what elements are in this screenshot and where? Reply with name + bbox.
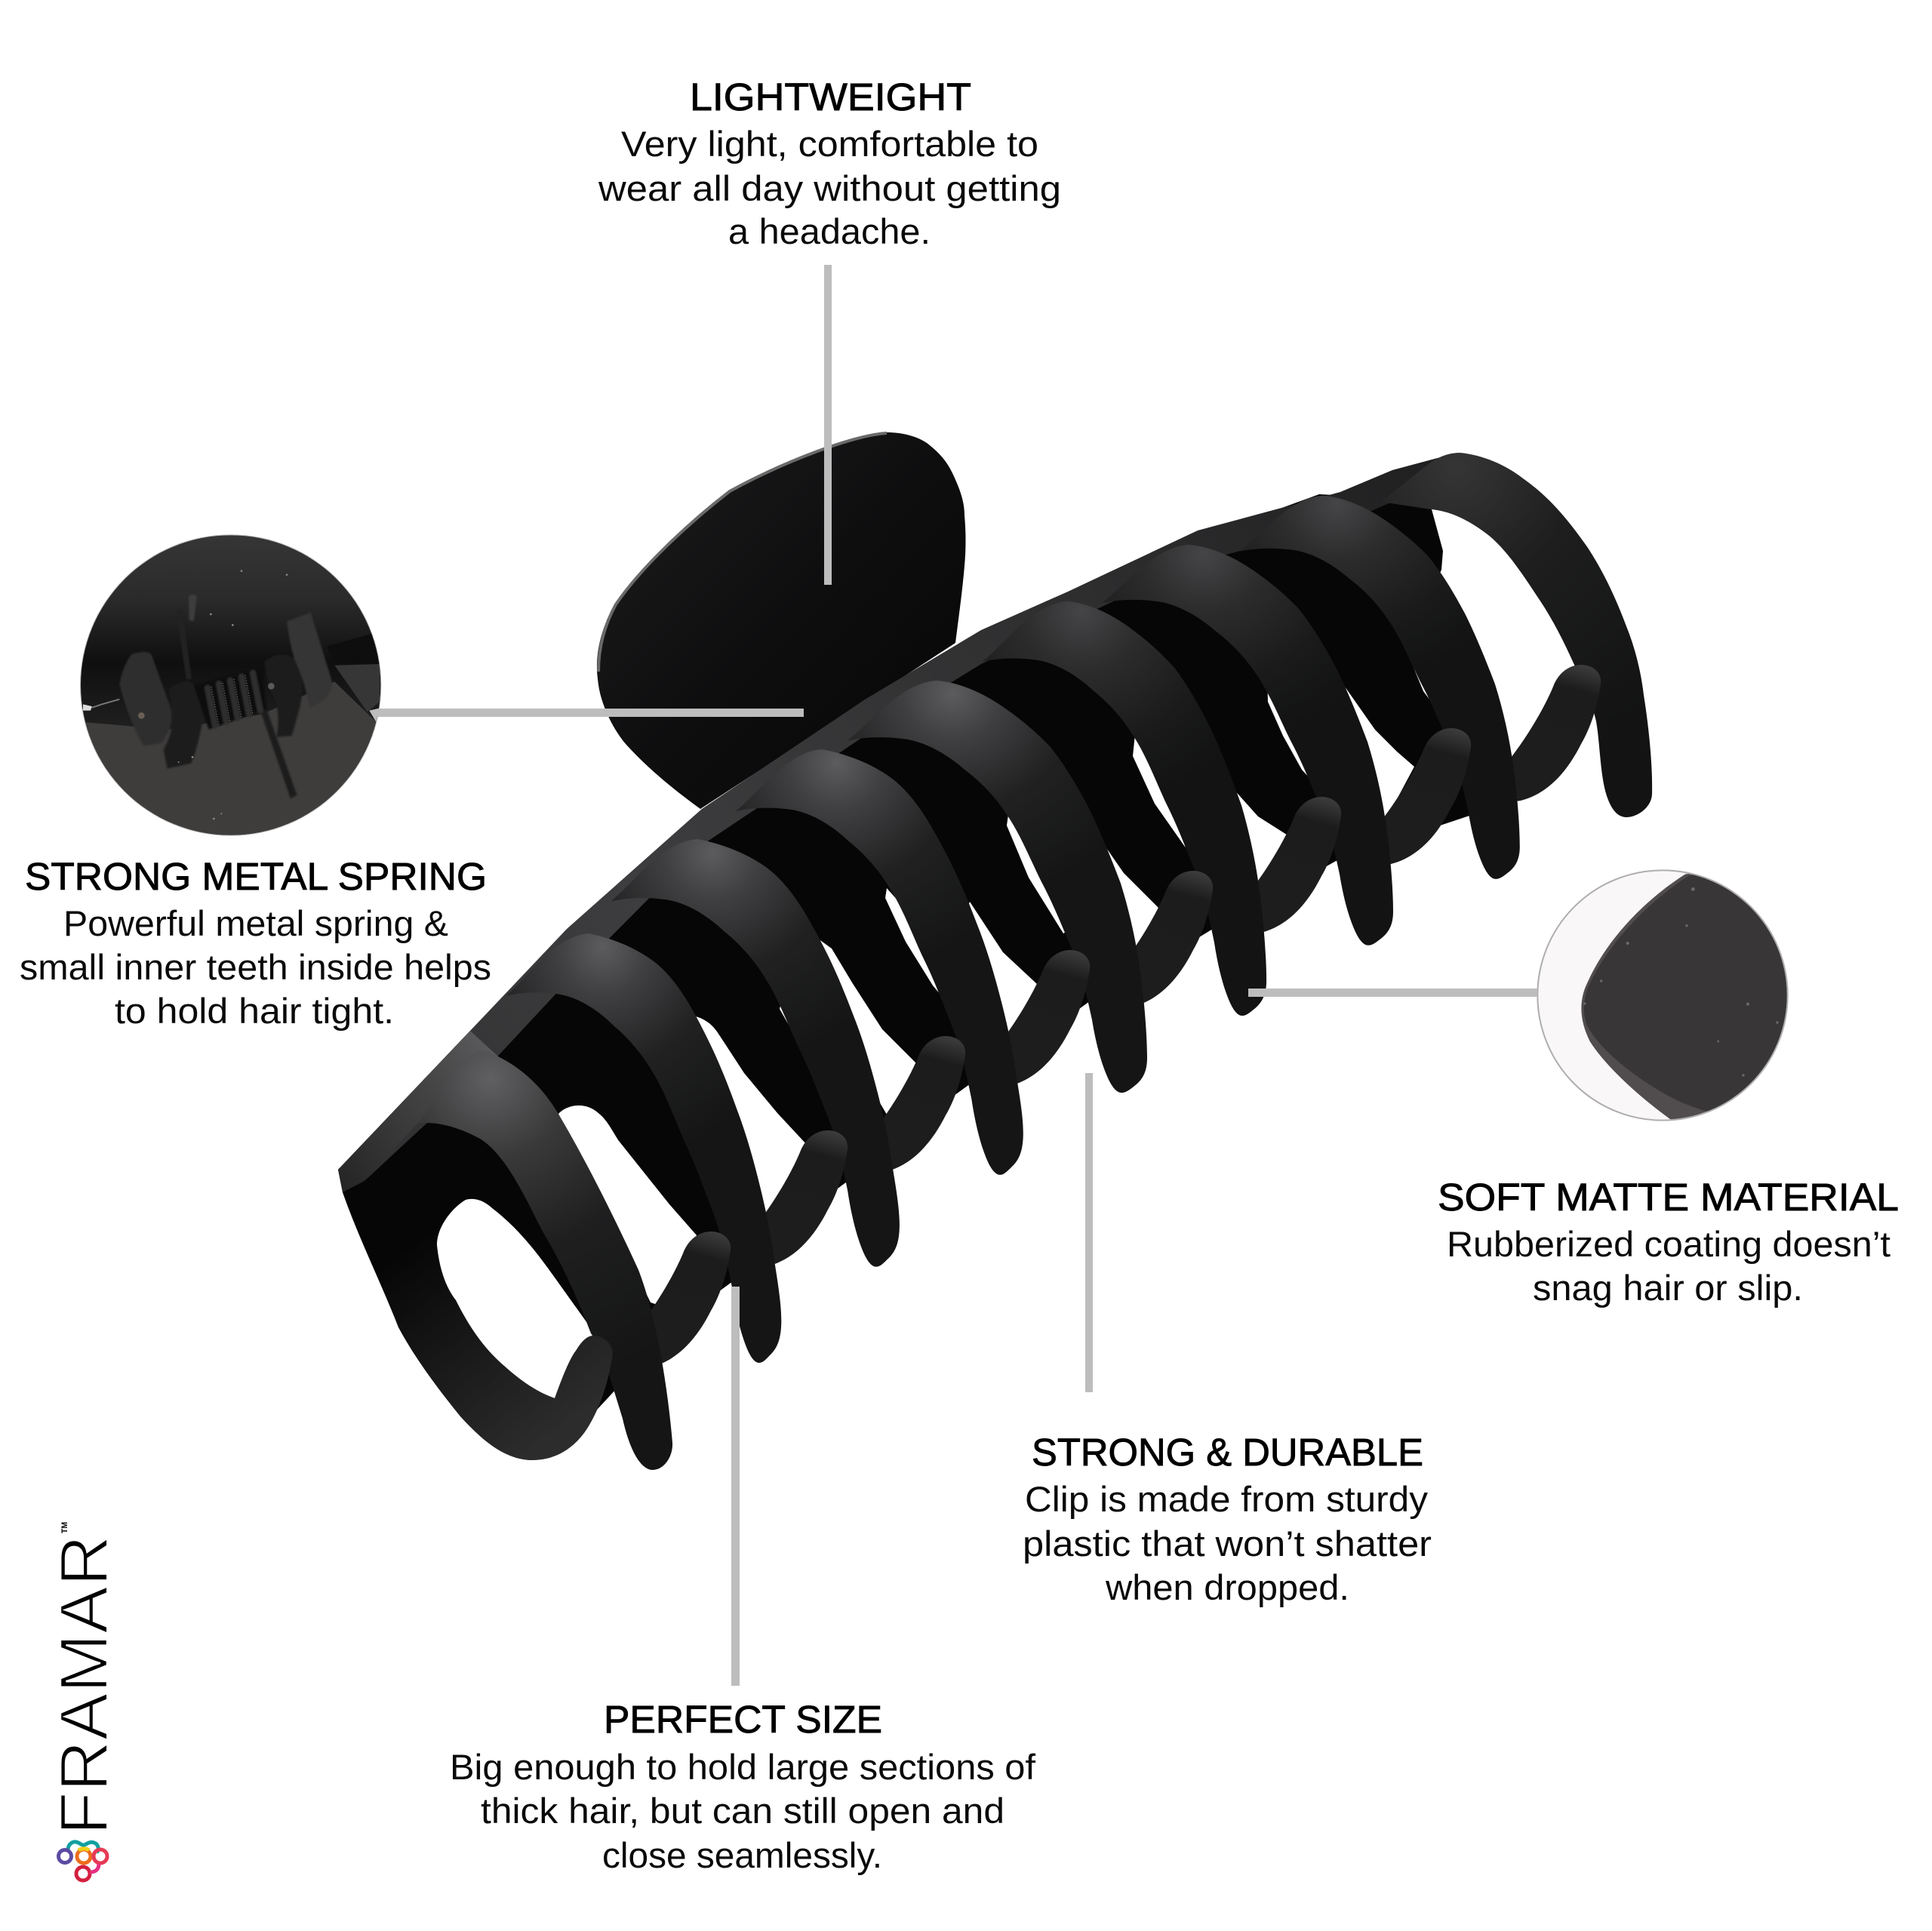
callout: lightweight: a headache. — [728, 211, 931, 251]
prong 1 — [417, 1050, 672, 1470]
tooth 2 — [620, 1231, 731, 1368]
claw clip product illustration — [338, 432, 1652, 1470]
callout: soft matte material: Rubberized coating doesn’t — [1447, 1224, 1890, 1264]
callout: lightweight: Very light, comfortable to — [621, 124, 1038, 164]
prong 3 — [611, 839, 900, 1267]
prong 7 — [1102, 545, 1393, 946]
callout: strong and durable: plastic that won’t shatter — [1023, 1524, 1432, 1564]
callout: strong metal spring: to hold hair tight. — [115, 991, 394, 1031]
tooth 5 — [980, 950, 1090, 1087]
brand logo: coloured rings — [59, 1842, 107, 1880]
prong 5 — [848, 681, 1147, 1093]
prong 2 — [506, 933, 781, 1363]
tooth 1 and front strap base — [460, 1336, 613, 1460]
callout: strong and durable — [1023, 1431, 1432, 1607]
callout: strong and durable: STRONG & DURABLE — [1032, 1431, 1423, 1474]
tooth 4 — [855, 1036, 965, 1173]
tooth 9 — [1491, 665, 1601, 801]
inner pocket black mass — [338, 494, 1472, 1460]
pointer line: matte material — [1248, 989, 1537, 997]
pointer line: lightweight — [824, 265, 832, 585]
callout: perfect size — [450, 1698, 1036, 1875]
inset circle: metal spring — [78, 533, 385, 840]
front band — [338, 1031, 498, 1192]
callout: strong metal spring: Powerful metal spring & — [63, 903, 448, 943]
tooth 7 — [1231, 797, 1341, 933]
callout: perfect size: PERFECT SIZE — [604, 1698, 882, 1741]
callout: soft matte material: SOFT MATTE MATERIAL — [1438, 1176, 1899, 1219]
pointer line: metal spring — [377, 709, 804, 717]
prong 9 — [1381, 453, 1652, 817]
brand logo: FRAMAR wordmark: FRAMAR — [47, 1535, 122, 1835]
prong 4 — [736, 749, 1023, 1175]
callout: strong metal spring: STRONG METAL SPRING — [25, 855, 487, 898]
tooth 3 — [737, 1130, 848, 1267]
paddle rim highlight — [598, 433, 887, 672]
tooth 8 — [1361, 728, 1471, 865]
prong 6 — [983, 601, 1266, 1016]
inset circle: matte material — [1537, 869, 1789, 1121]
prong 8 — [1239, 496, 1520, 879]
callout: strong and durable: when dropped. — [1105, 1567, 1349, 1607]
callout: strong and durable: Clip is made from sturdy — [1025, 1479, 1429, 1519]
front strap — [343, 1147, 504, 1416]
white gaps between teeth — [437, 622, 1447, 1398]
callout: perfect size: close seamlessly. — [602, 1835, 882, 1875]
callout: strong metal spring — [20, 855, 491, 1031]
callout: perfect size: thick hair, but can still open and — [481, 1791, 1004, 1831]
back jaw paddle — [597, 432, 966, 809]
callout: soft matte material — [1438, 1176, 1899, 1308]
pointer line: strong and durable — [1085, 1073, 1093, 1392]
callout: perfect size: Big enough to hold large sections of — [450, 1747, 1036, 1787]
pointer line: perfect size — [731, 1287, 740, 1686]
spine strip — [338, 453, 1457, 1192]
callout: soft matte material: snag hair or slip. — [1533, 1268, 1803, 1308]
brand logo: FRAMAR wordmark: TM — [60, 1522, 69, 1533]
callout: lightweight: wear all day without getting — [598, 168, 1061, 208]
callout: lightweight: LIGHTWEIGHT — [690, 75, 971, 118]
callout: lightweight — [598, 75, 1061, 251]
tooth 6 — [1103, 871, 1213, 1007]
callout: strong metal spring: small inner teeth inside helps — [20, 947, 491, 987]
